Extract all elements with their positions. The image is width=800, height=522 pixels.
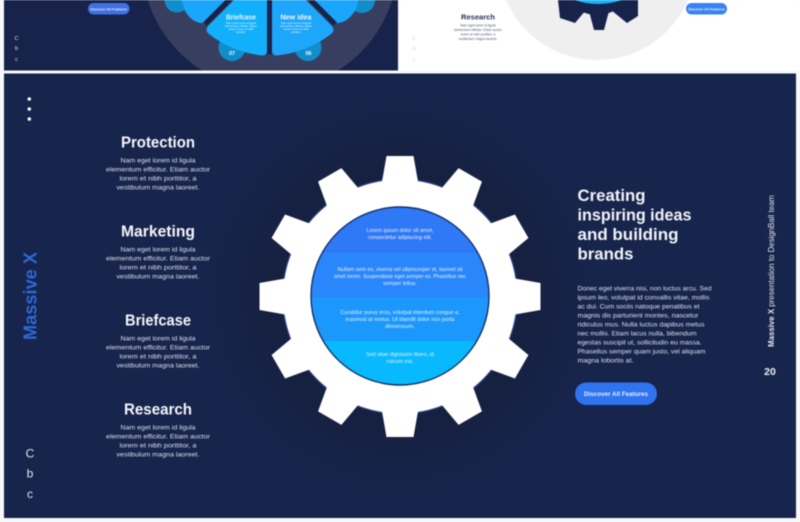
feature: Protection: vestibulum magna laoreet.	[116, 184, 200, 191]
petal numbers: 06	[305, 51, 312, 57]
vertical credit line: Massive X presentation to DesignBall team	[767, 195, 776, 347]
feature: Protection: elementum efficitur. Etiam auctor	[106, 166, 210, 173]
side letters	[26, 446, 35, 501]
side letters: top-right: C	[412, 36, 416, 42]
side letters: c	[27, 487, 33, 501]
paragraph: ridiculus mus. Nulla luctus dapibus metus	[578, 322, 705, 328]
heading: creating inspiring ideas: inspiring ideas	[578, 206, 692, 224]
band text 1: Lorem ipsum dolor sit amet,	[366, 228, 434, 234]
side letters: top-right	[412, 36, 416, 63]
feature: Briefcase: vestibulum magna laoreet.	[116, 362, 200, 369]
side letters: top-left	[15, 36, 19, 63]
paragraph: nec mollis. Etiam lacus nulla, bibendum	[578, 330, 696, 338]
petal label: New idea	[280, 12, 313, 34]
side letters: C	[26, 446, 35, 460]
button: discover all features: Discover All Features	[584, 391, 648, 398]
panel: top-left slide fragment	[3, 0, 399, 72]
button: top-right	[686, 3, 727, 14]
petal label: Briefcase: elementum efficitur. Etiam	[225, 24, 258, 28]
petal numbers	[229, 51, 312, 57]
side letters: b	[27, 466, 34, 480]
band text 3	[340, 310, 460, 330]
band text 4	[366, 352, 434, 365]
page number: 20	[764, 366, 776, 378]
button: top-right: Discover All Features	[688, 8, 725, 12]
feature: Marketing: Nam eget lorem id ligula	[120, 246, 196, 253]
petal label: New idea: elementum efficitur. Etiam	[280, 24, 313, 28]
gear diagram	[498, 0, 696, 60]
paragraph: ipsum leo, volutpat id convallis vitae, mollis	[578, 294, 710, 302]
feature: Protection	[106, 134, 210, 191]
feature: Briefcase: elementum efficitur. Etiam auctor	[106, 344, 210, 351]
petal label: Briefcase: Nam eget lorem id ligula	[226, 21, 257, 25]
petal label: Briefcase	[225, 12, 258, 34]
band text 3: Curabitur purus eros, volutpat interdum congue a,	[340, 310, 460, 316]
menu dots icon	[28, 97, 31, 121]
petal label: New idea: auctor lorem et nibh	[284, 27, 309, 31]
button: discover all features	[575, 382, 657, 405]
text block: Research: vestibulum magna laoreet.	[459, 37, 497, 41]
feature: Briefcase: lorem et nibh porttitor, a	[120, 353, 197, 360]
text block: Research: lorem et nibh porttitor, a	[461, 32, 495, 36]
paragraph: magna lobortis at.	[578, 358, 634, 364]
band text 4: Sed vitae dignissim libero, id	[366, 352, 434, 358]
feature: Briefcase: Nam eget lorem id ligula	[120, 335, 196, 342]
paragraph: Phasellus semper quam justo, vel aliquam	[578, 348, 706, 356]
petal label: Briefcase: porttitor.	[236, 30, 246, 34]
band text 4: rutrum est.	[386, 359, 414, 365]
feature: Protection: Protection	[121, 134, 195, 152]
button: top-left: Discover All Features	[90, 8, 127, 12]
paragraph	[578, 286, 712, 364]
paragraph: magnis dis parturient montes, nascetur	[578, 312, 699, 320]
side letters: top-left: C	[15, 36, 19, 42]
petal label: Briefcase: Briefcase	[226, 12, 256, 22]
petal diagram	[148, 0, 392, 71]
text block: Research	[454, 12, 503, 41]
feature: Research: elementum efficitur. Etiam auctor	[106, 433, 210, 440]
petal numbers: 07	[229, 51, 235, 57]
feature: Marketing: lorem et nibh porttitor, a	[120, 264, 197, 271]
side letters: top-left: b	[15, 46, 18, 52]
gear centre: four stacked bands	[311, 207, 489, 386]
paragraph: Donec eget viverra nisi, non luctus arcu. Sed	[578, 286, 712, 292]
band text 1	[366, 228, 434, 241]
side letters: top-left: c	[15, 57, 18, 63]
feature: Briefcase	[106, 312, 210, 369]
text block: Research: elementum efficitur. Etiam auctor	[454, 28, 503, 32]
feature: Marketing: elementum efficitur. Etiam auctor	[106, 255, 210, 262]
feature: Protection: lorem et nibh porttitor, a	[120, 175, 197, 182]
petal label: New idea: porttitor.	[291, 30, 301, 34]
vertical brand label: Massive X	[20, 251, 40, 340]
heading: creating inspiring ideas: and building	[578, 225, 678, 244]
feature: Briefcase: Briefcase	[125, 312, 191, 330]
feature: Marketing	[106, 224, 210, 280]
gear	[260, 156, 540, 437]
feature: Research: Nam eget lorem id ligula	[120, 424, 196, 431]
band text 3: euismod at metus. Ut blandit dolor non porta	[346, 317, 455, 323]
heading: creating inspiring ideas: brands	[578, 244, 634, 264]
band text 2: Nullam sem ex, viverra vel ullamcorper et, laoreet sit	[338, 267, 463, 273]
side letters: top-right: c	[413, 57, 416, 63]
band text 3: dimensum.	[385, 324, 415, 330]
side letters: top-right: b	[412, 46, 416, 52]
text block: Research: Research	[461, 12, 495, 22]
button: top-left	[88, 3, 130, 14]
paragraph: ac dui. Cum sociis natoque penatibus et	[578, 304, 700, 310]
band text 1: consectetur adipiscing elit.	[368, 235, 432, 241]
feature: Protection: Nam eget lorem id ligula	[120, 157, 196, 164]
paragraph: egestas suscipit ut, sollicitudin eu massa.	[578, 340, 702, 346]
petal label: New idea: New idea	[280, 12, 312, 22]
heading: creating inspiring ideas: Creating	[578, 186, 646, 205]
heading: creating inspiring ideas	[578, 186, 692, 264]
text block: Research: Nam eget lorem id ligula	[460, 24, 496, 28]
band text 2: semper tellus.	[383, 281, 417, 287]
petal label: Briefcase: auctor lorem et nibh	[229, 27, 254, 31]
feature: Marketing: Marketing	[121, 224, 195, 240]
petal label: New idea: Nam eget lorem id ligula	[281, 21, 312, 25]
feature: Research: vestibulum magna laoreet.	[116, 451, 200, 458]
feature: Research	[106, 402, 210, 458]
feature: Research: Research	[124, 402, 192, 418]
panel: top-right slide fragment	[400, 0, 800, 70]
band text 2: amet lorem. Suspendisse eget semper ex. Phasellus nec	[334, 274, 466, 280]
feature: Marketing: vestibulum magna laoreet.	[116, 273, 200, 280]
band text 2	[334, 267, 466, 287]
feature: Research: lorem et nibh porttitor, a	[120, 442, 197, 449]
